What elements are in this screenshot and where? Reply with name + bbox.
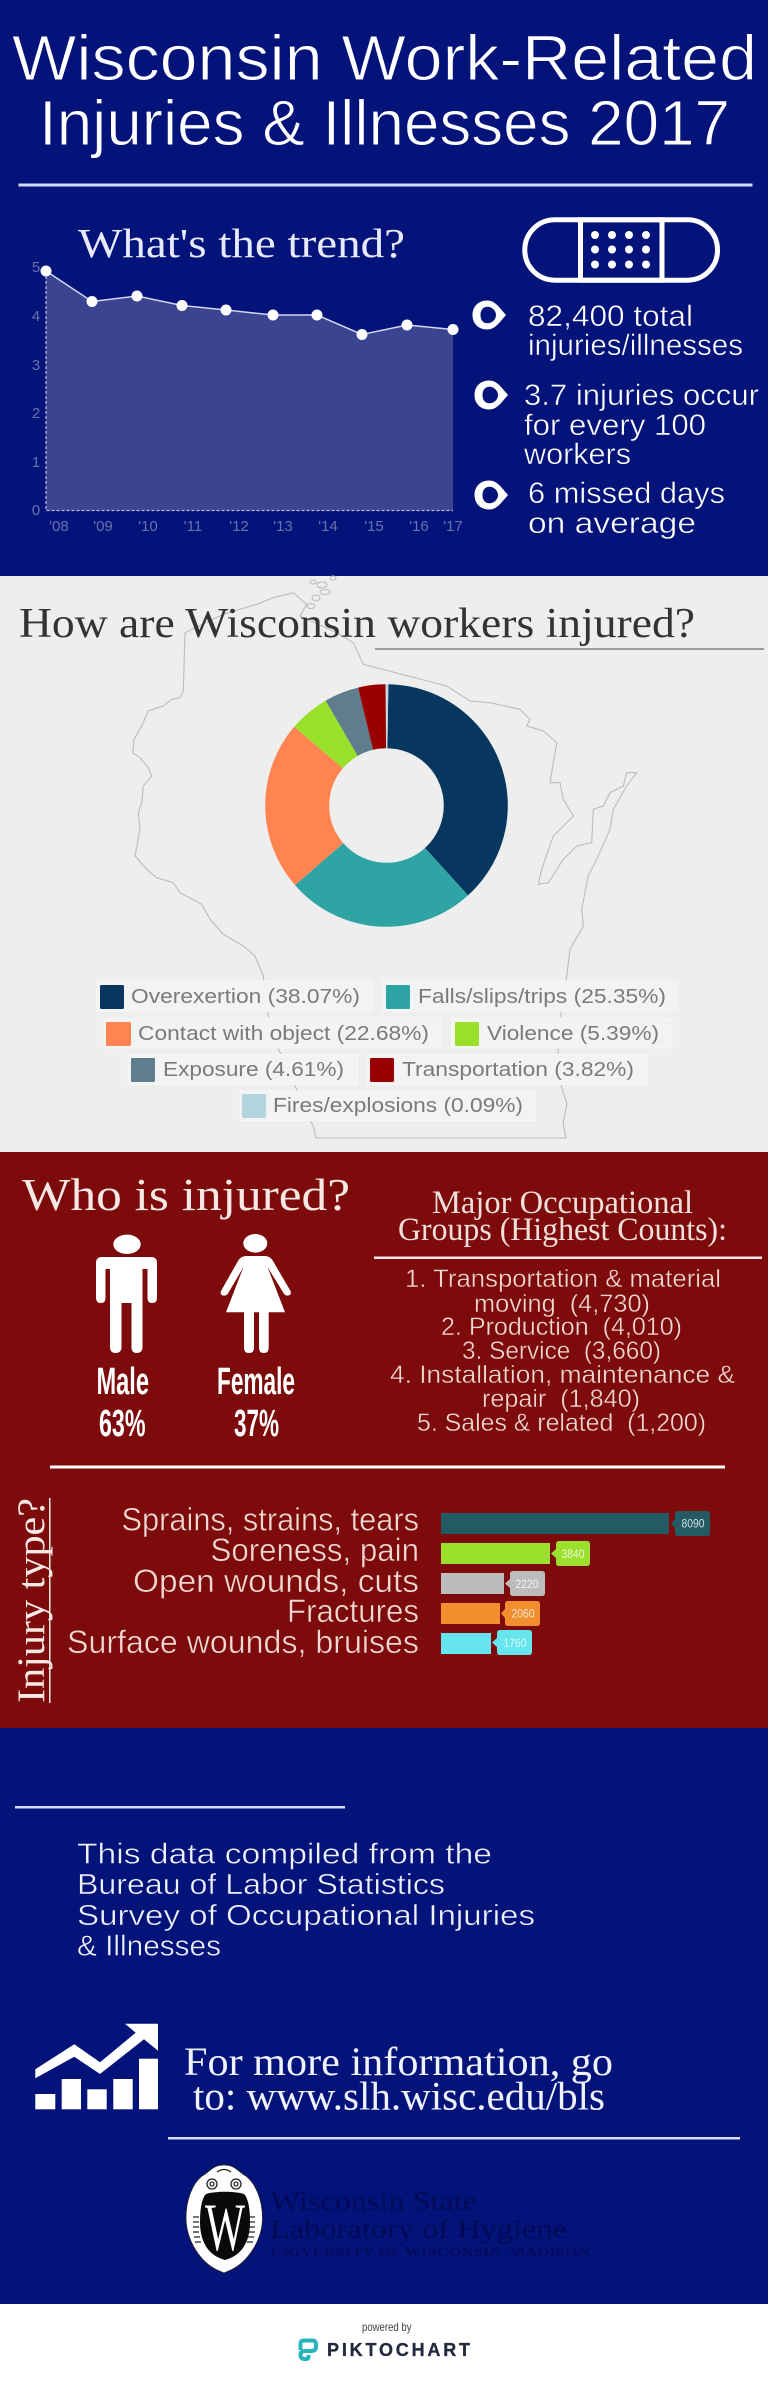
bar labels: injury types: Soreness, pain [210,1532,419,1568]
line chart: injury rate: '08 [49,518,69,535]
footer: Piktochart [0,2304,768,2381]
line chart: injury rate: '14 [318,518,338,535]
icon: Piktochart mark [300,2340,316,2359]
bar chart: injury type counts: 3840 [562,1547,585,1561]
heading: major occupational groups: Groups (Highest Counts): [398,1212,727,1248]
list: occupational groups [390,1265,735,1437]
text: more information: For more information, go [184,2039,613,2084]
icon: bandage [525,220,718,280]
logo: laboratory name: UNIVERSITY OF WISCONSIN–MADISON [270,2244,591,2259]
logo: laboratory name: Laboratory of Hygiene [270,2213,567,2244]
legend: Contact with object (22.68%) [138,1023,429,1045]
line chart: injury rate: 0 [32,502,40,519]
icon: male figure [96,1235,157,1353]
bullet: total injuries [472,300,743,362]
bullet: total injuries: injuries/illnesses [528,329,743,362]
heading: major occupational groups [398,1185,727,1248]
panel: sources and contact [0,1728,768,2304]
list: occupational groups: 4. Installation, maintenance & [390,1361,735,1389]
icon: female figure [221,1234,291,1353]
bar chart: injury type counts: 8090 [682,1516,705,1530]
legend: Violence (5.39%) [487,1023,659,1045]
bullet: rate per 100 workers: for every 100 [524,409,706,442]
bar chart: injury type counts: 2220 [516,1577,539,1591]
title: Wisconsin Work-Related [12,22,757,94]
bullet: missed days: 6 missed days [528,477,725,510]
list: occupational groups: moving (4,730) [474,1290,650,1318]
bar chart: injury type counts: 2060 [512,1606,535,1620]
heading: major occupational groups: Major Occupational [432,1185,693,1221]
line chart: injury rate: '12 [229,518,249,535]
legend: Exposure (4.61%) [163,1059,344,1081]
text: data source: This data compiled from the [77,1838,492,1870]
line chart: injury rate: 1 [32,454,40,471]
heading: who is injured: Who is injured? [22,1169,350,1220]
line chart: injury rate: '11 [184,518,202,535]
panel: trend [0,0,768,576]
line chart: injury rate: 5 [32,259,40,276]
text: data source: Survey of Occupational Injuries [77,1900,535,1932]
list: occupational groups: 2. Production (4,010) [441,1313,682,1341]
line chart: injury rate: 4 [32,308,40,325]
logo: laboratory name [270,2185,591,2259]
panel: how workers are injured [0,576,768,1152]
footer: Piktochart: powered by [362,2320,412,2334]
list: occupational groups: 1. Transportation & material [405,1265,721,1293]
heading: how are workers injured: How are Wisconsin workers injured? [19,601,695,647]
map: Wisconsin outline [133,576,637,1138]
bar labels: injury types [67,1502,419,1660]
text: more information [184,2039,613,2118]
bar chart: injury type counts: 1760 [504,1636,527,1650]
stat: female share: Female [217,1361,295,1403]
line chart: injury rate: 3 [32,357,40,374]
bar labels: injury types: Surface wounds, bruises [67,1624,419,1660]
line chart: injury rate [32,259,463,535]
text: data source: & Illnesses [77,1930,221,1962]
line chart: injury rate: '10 [138,518,158,535]
legend [96,981,678,1120]
logo: university crest [186,2165,262,2273]
heading: injury type: Injury type? [10,1498,53,1703]
line chart: injury rate: '15 [364,518,384,535]
bullet: rate per 100 workers [474,379,759,471]
stat: female share [217,1361,295,1445]
title [12,22,757,159]
icon: growth chart [35,2024,158,2109]
stat: female share: 37% [234,1403,279,1445]
text: more information: to: www.slh.wisc.edu/bls [193,2074,605,2118]
donut chart: injury causes [297,716,476,895]
bullet: rate per 100 workers: 3.7 injuries occur [524,379,759,412]
line chart: injury rate: '09 [93,518,113,535]
bar labels: injury types: Fractures [287,1593,419,1629]
bullet: missed days [474,477,725,540]
heading: what's the trend: What's the trend? [78,220,405,266]
stat: male share: Male [96,1361,149,1403]
logo: laboratory name: Wisconsin State [270,2185,477,2216]
bullet: total injuries: 82,400 total [528,300,693,333]
panel: who is injured [0,1152,768,1728]
line chart: injury rate: '17 [443,518,463,535]
stat: male share: 63% [99,1403,146,1445]
legend: Transportation (3.82%) [402,1059,634,1081]
list: occupational groups: 5. Sales & related (1,200) [417,1409,706,1437]
list: occupational groups: repair (1,840) [482,1385,640,1413]
bar labels: injury types: Open wounds, cuts [133,1563,419,1599]
stat: male share [96,1361,149,1445]
list: occupational groups: 3. Service (3,660) [462,1337,661,1365]
legend: Falls/slips/trips (25.35%) [418,986,666,1008]
text: data source: Bureau of Labor Statistics [77,1869,445,1901]
footer: Piktochart: PIKTOCHART [327,2340,470,2360]
bar chart: injury type counts [441,1511,710,1655]
legend: Overexertion (38.07%) [131,986,360,1008]
logo: university crest: W [205,2189,246,2265]
title: Injuries & Illnesses 2017 [39,87,730,159]
bullet: missed days: on average [528,507,696,540]
line chart: injury rate: '16 [409,518,429,535]
bullet: rate per 100 workers: workers [523,438,631,471]
line chart: injury rate: '13 [273,518,293,535]
text: data source [77,1838,535,1962]
bar labels: injury types: Sprains, strains, tears [122,1502,419,1538]
legend: Fires/explosions (0.09%) [273,1095,523,1117]
line chart: injury rate: 2 [32,405,40,422]
